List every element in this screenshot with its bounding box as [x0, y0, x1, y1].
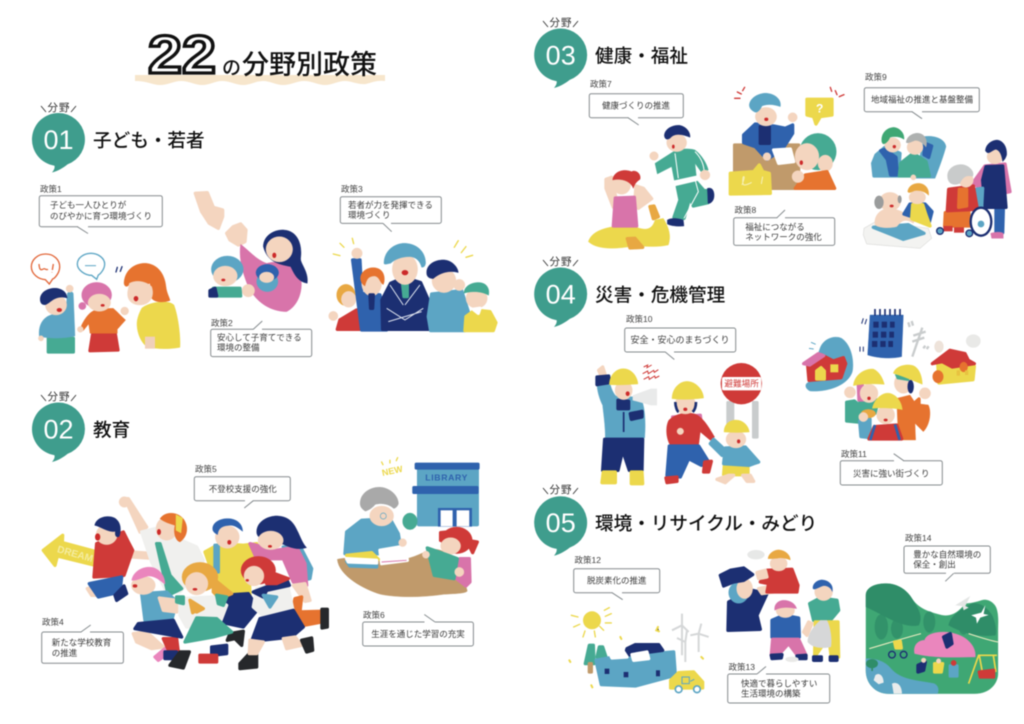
boy yellow shirt: [205, 544, 257, 595]
section 04 header: 分野: [550, 256, 572, 268]
section 05 header: 分野: [550, 484, 572, 496]
policy 13 callout: [728, 662, 830, 703]
speech bubble red: [31, 254, 60, 284]
bath scene: [863, 221, 932, 248]
illustration: community cleanup: [720, 550, 839, 662]
girl pink hair: [133, 632, 163, 649]
policy 12 callout: 脱炭素化の推進: [587, 576, 647, 586]
section 03: [534, 17, 1010, 248]
section 01 header: [32, 102, 205, 172]
dream arrow: [43, 535, 97, 565]
policy 5 callout: 不登校支援の強化: [209, 484, 277, 494]
policy 11 callout: [840, 449, 942, 485]
illustration: evacuation: [597, 363, 762, 484]
orange leg and shoes: [292, 597, 322, 627]
section 01 header: 分野: [48, 102, 70, 114]
policy 6 callout: [363, 610, 473, 646]
leaning utility pole: [908, 321, 929, 357]
policy 14 callout: 豊かな自然環境の: [913, 550, 981, 560]
illustration: consultation desk: ?: [816, 102, 823, 116]
girl blonde: [212, 645, 227, 655]
illustration: exercise and running: [588, 125, 714, 248]
policy 5 callout: [194, 464, 290, 508]
policy 8 callout: [734, 205, 835, 245]
policy 14 callout: 保全・創出: [913, 560, 956, 570]
policy 6 callout: 生涯を通じた学習の充実: [371, 629, 465, 639]
carer with apron: [973, 164, 1010, 195]
section 04 header: 災害・危機管理: [595, 284, 726, 306]
runner: [674, 182, 708, 218]
section 04 header: 04: [546, 280, 576, 310]
policy 1 callout: のびやかに育つ環境づくり: [50, 211, 152, 221]
section 02 header: [32, 391, 130, 462]
section 05 header: 環境・リサイクル・みどり: [595, 513, 817, 534]
policy 6 callout: 政策6: [363, 610, 385, 620]
policy 9 callout: 政策9: [865, 72, 887, 82]
section 01 header: 01: [43, 125, 74, 155]
illustration: library reading: [337, 458, 478, 597]
policy 8 callout: ネットワークの強化: [745, 232, 822, 242]
policy 7 callout: [589, 79, 683, 125]
section 01 header: 子ども・若者: [93, 130, 205, 151]
section 02 header: 分野: [48, 391, 70, 403]
office building: [868, 315, 903, 358]
title: [135, 25, 385, 85]
policy 3 callout: 若者が力を発揮できる: [348, 200, 433, 210]
policy 8 callout: 政策8: [734, 205, 757, 215]
wheelchair scene top: [915, 136, 946, 178]
section 03 header: 03: [546, 40, 576, 70]
policy 4 callout: 政策4: [42, 617, 64, 627]
section 04: [534, 256, 981, 485]
policy 2 callout: [211, 318, 312, 357]
boy: [48, 338, 73, 352]
girl with white shirt: [142, 529, 203, 592]
illustration: welfare care: [863, 127, 1010, 248]
policy 10 callout: [625, 314, 736, 360]
policy 3 callout: 環境づくり: [348, 210, 391, 220]
section 01: [31, 102, 205, 352]
policy 2 callout: 環境の整備: [217, 342, 260, 352]
woman: [137, 302, 180, 349]
policy 8 callout: 福祉につながる: [745, 222, 805, 232]
policy 11 callout: 災害に強い街づくり: [853, 469, 930, 479]
illustration: solar house and EV: [569, 608, 709, 693]
illustration: youth group: [329, 238, 496, 331]
illustration: children talking: [31, 253, 180, 352]
section 02 header: 教育: [93, 420, 130, 440]
illustration: mother and children: [195, 193, 308, 312]
illustration: running students with dream arrow: [43, 497, 327, 669]
girl navy hair with backpack: [283, 546, 312, 582]
section 03 header: 健康・福祉: [595, 46, 688, 66]
section 01 policy 2: [195, 193, 312, 357]
girl: [90, 334, 118, 351]
illustration: library reading: LIBRARY: [425, 472, 468, 482]
policy 10 callout: 安全・安心のまちづくり: [630, 334, 730, 345]
policy 14 callout: 政策14: [905, 533, 932, 543]
policy 13 callout: 生活環境の構築: [741, 688, 801, 698]
policy 12 callout: 政策12: [574, 555, 601, 565]
policy 1 callout: [39, 184, 162, 234]
stretching woman: [588, 218, 670, 248]
policy 4 callout: の推進: [52, 648, 78, 658]
illustration: evacuation: 避難場所: [724, 378, 759, 389]
policy 14 callout: [904, 533, 990, 581]
policy 4 callout: 新たな学校教育: [52, 638, 111, 648]
section 05 header: 05: [546, 508, 576, 538]
policy 1 callout: 政策1: [40, 184, 62, 194]
policy 9 callout: [864, 72, 979, 119]
helmeted people: [897, 395, 930, 440]
illustration: library reading: NEW: [381, 464, 404, 478]
illustration: nature park: [866, 584, 998, 694]
policy 4 callout: [42, 617, 123, 663]
policy 3 callout: [340, 184, 441, 232]
policy 2 callout: 政策2: [211, 318, 233, 328]
section 03 header: 分野: [550, 17, 572, 29]
policy 13 callout: 快適で暮らしやすい: [741, 678, 817, 688]
policy 12 callout: [574, 555, 660, 600]
illustration: disaster-resilient town: [804, 309, 981, 440]
policy 2 callout: 安心して子育てできる: [217, 332, 302, 342]
title number 22: 22: [148, 25, 216, 85]
policy 7 callout: 健康づくりの推進: [602, 100, 670, 110]
section 04 header: [534, 256, 726, 327]
title underline wave: [135, 75, 385, 85]
section 01 policy 3: [329, 184, 496, 331]
section 02 header: 02: [43, 414, 74, 444]
right burning house: [966, 334, 981, 348]
policy 13 callout: 政策13: [728, 662, 755, 672]
illustration: consultation desk: [730, 87, 844, 194]
section 03 header: [534, 17, 688, 88]
policy 5 callout: 政策5: [195, 464, 217, 474]
policy 9 callout: 地域福祉の推進と基盤整備: [871, 94, 973, 104]
policy 7 callout: 政策7: [590, 79, 612, 89]
title text: の分野別政策: [222, 50, 377, 80]
policy 1 callout: 子ども一人ひとりが: [50, 200, 127, 210]
left house with blue wave: [806, 337, 853, 391]
policy 10 callout: 政策10: [626, 314, 653, 324]
section 05 header: [534, 484, 817, 556]
illustration: running students with dream arrow: DREAM: [56, 544, 94, 565]
policy 3 callout: 政策3: [341, 184, 363, 194]
policy 11 callout: 政策11: [841, 449, 867, 459]
seated old woman in wheelchair: [976, 188, 983, 208]
girl sailor uniform: [253, 580, 293, 619]
speech bubble blue: [77, 253, 105, 279]
boy red shirt: [125, 499, 147, 532]
section 05: [534, 484, 998, 703]
section 02: [32, 391, 478, 669]
